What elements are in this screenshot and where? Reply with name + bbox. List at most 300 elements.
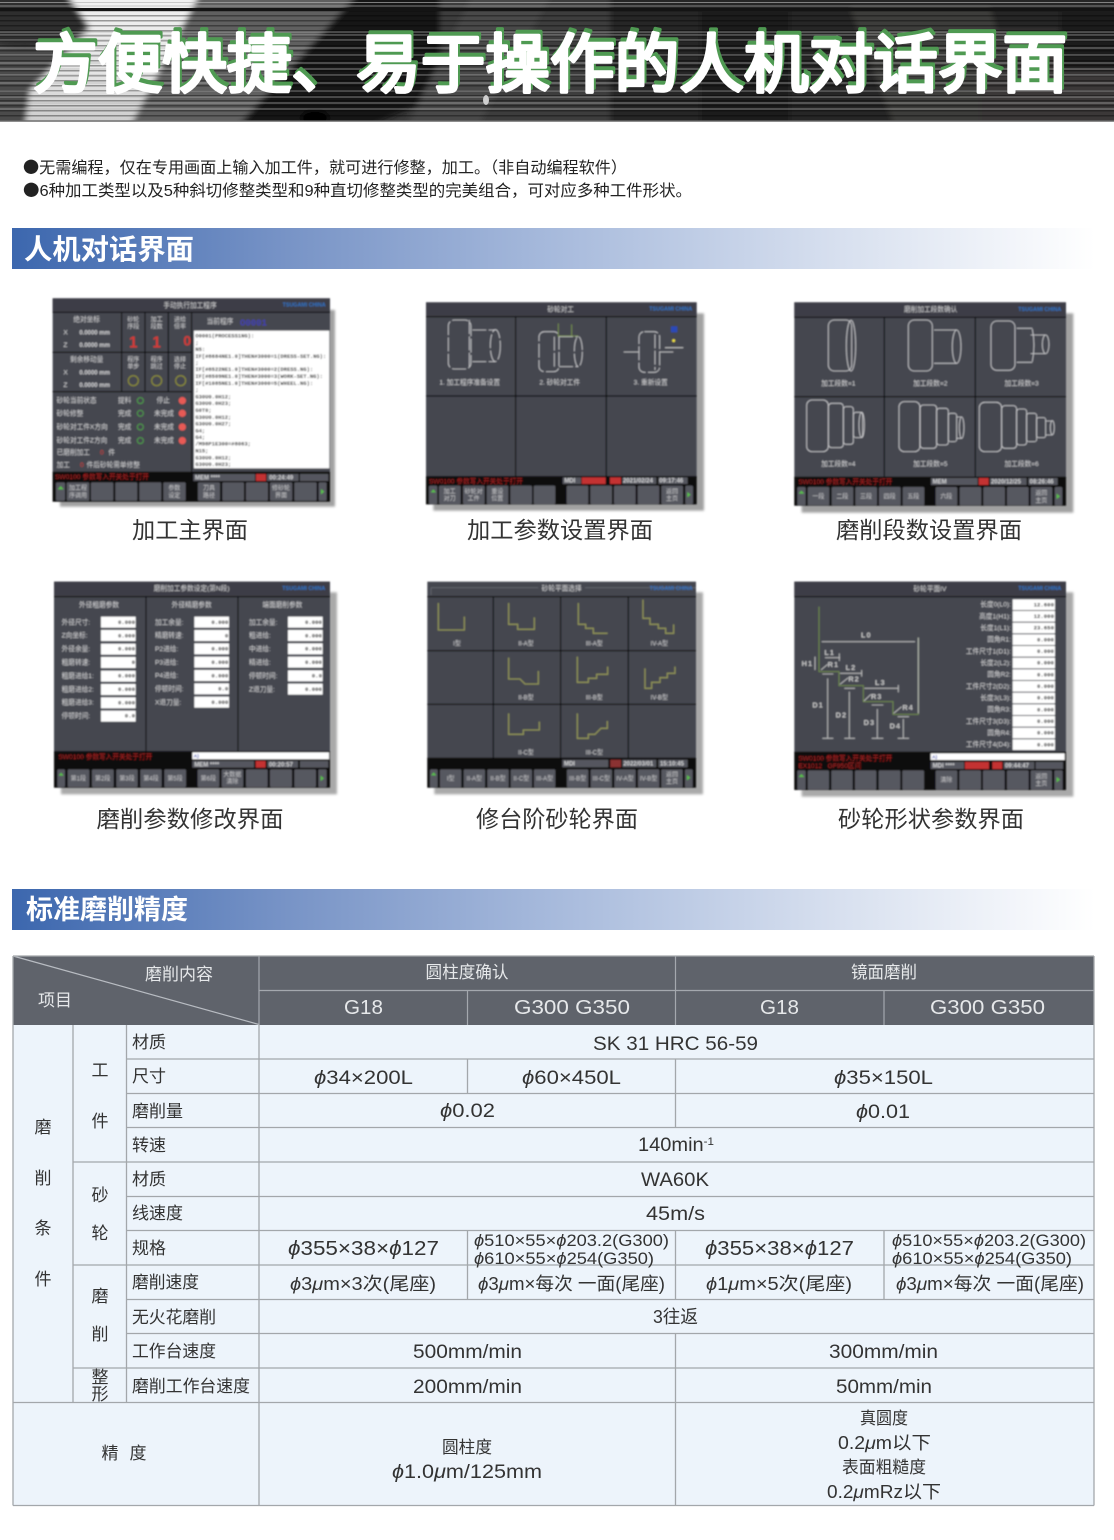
table values: 圆柱度 <box>442 1438 492 1457</box>
screen: 磨削参数修改界面: 外径粗磨参数 <box>79 600 119 609</box>
screen: 磨削参数修改界面: 0.000 <box>211 699 229 706</box>
row group labels: 件 <box>92 1112 108 1131</box>
screen: 加工主界面: 停止 <box>157 396 170 405</box>
screen: 砂轮形状参数界面: 12.600 <box>1034 601 1055 608</box>
caption: 磨削参数修改界面 <box>96 806 284 832</box>
screen: 磨削参数修改界面: 0.000 <box>305 632 323 639</box>
screen: 磨削参数修改界面: 0.000 <box>211 619 229 626</box>
screen: 砂轮形状参数界面: EX1012 GF950区间 <box>798 762 862 770</box>
screen: 磨削段数设置界面: 2020/12/25 <box>991 479 1022 485</box>
screen: 砂轮形状参数界面: 长度0(L0): <box>980 600 1011 609</box>
screen: 修台阶砂轮界面: IV-A型 <box>616 774 634 782</box>
screen: 加工主界面: 程序 <box>151 356 163 364</box>
screen: 加工主界面: 0.0000 mm <box>79 343 110 349</box>
table header: G300 G350 <box>514 997 630 1019</box>
screen: 修台阶砂轮界面: 主页 <box>666 778 678 786</box>
screen: 磨削参数修改界面: 0.000 <box>305 659 323 666</box>
screen: 加工主界面: 砂轮修整 <box>57 408 84 417</box>
screen: 磨削段数设置界面: 五段 <box>907 492 919 500</box>
screen: 修台阶砂轮界面: II-A型 <box>467 774 482 782</box>
table values: 300mm/min <box>829 1342 938 1363</box>
table header: 圆柱度确认 <box>426 963 508 982</box>
screen: 砂轮形状参数界面: 工件尺寸1(D1): <box>966 646 1011 655</box>
screen: 加工主界面: 0.0000 mm <box>79 331 110 337</box>
screen: 磨削段数设置界面: 加工段数=3 <box>1005 379 1039 388</box>
screen: 加工主界面: G30U0.0H23; <box>195 400 231 407</box>
screen: 加工主界面: 进给 <box>174 316 186 324</box>
screen: 修台阶砂轮界面: I型 <box>447 774 454 782</box>
row group labels: 轮 <box>92 1224 108 1243</box>
table values: 500mm/min <box>413 1342 522 1363</box>
section heading: 标准磨削精度: 标准磨削精度 <box>26 895 188 925</box>
table values: ϕ0.02 <box>440 1101 495 1122</box>
screen: 加工主界面: 砂轮对工件X方向 <box>57 422 108 431</box>
screen: 磨削参数修改界面: SW0100 参数写入开关处于打开 <box>58 752 153 761</box>
screen: 加工主界面: 刀具 <box>203 485 215 492</box>
screen: 加工主界面: X <box>63 369 68 376</box>
screen: 加工主界面: X <box>63 330 68 337</box>
screen: 修台阶砂轮界面: 2022/03/01 <box>623 761 654 767</box>
screen: 砂轮形状参数界面: 长度1(L1): <box>980 623 1011 632</box>
row group labels: 削 <box>92 1325 108 1344</box>
screen: 加工参数设置界面: SW0100 参数写入开关处于打开 <box>429 476 523 485</box>
screen: 砂轮形状参数界面: 0.000 <box>1037 695 1055 702</box>
screen: 加工主界面: 0.0000 mm <box>79 370 110 376</box>
screen: 加工参数设置界面: 位置 <box>491 495 503 503</box>
screen: 磨削参数修改界面: A) <box>194 754 199 760</box>
screen: 磨削参数修改界面: TSUGAMI CHINA <box>282 586 325 592</box>
intro text: ●6种加工类型以及5种斜切修整类型和9种直切修整类型的完美组合，可对应多种工件形状。 <box>23 177 692 201</box>
screen: 加工主界面: O0001(PROCESS1NG): <box>195 333 254 340</box>
table values: ϕ0.01 <box>856 1102 910 1123</box>
table header: G300 G350 <box>930 997 1045 1019</box>
table values: 真圆度 <box>860 1409 908 1428</box>
screen: 磨削段数设置界面: 返回 <box>1035 490 1047 497</box>
row names: 磨削量 <box>132 1102 183 1121</box>
screen: 磨削段数设置界面 <box>794 302 1073 513</box>
row names <box>132 1033 250 1396</box>
screen: 砂轮形状参数界面: L2 <box>846 663 856 672</box>
screen: 加工主界面: 0 <box>80 462 84 469</box>
screen: 修台阶砂轮界面: I型 <box>453 640 461 648</box>
caption: 加工参数设置界面 <box>467 517 653 543</box>
screen: 加工主界面: 序调用 <box>69 491 87 499</box>
screen: 加工参数设置界面: 2. 砂轮对工件 <box>539 377 580 386</box>
screen: 磨削参数修改界面: 加工余量: <box>155 617 184 626</box>
screen: 加工主界面: O0001 <box>240 318 268 328</box>
screen: 加工主界面: ; <box>195 339 199 346</box>
table values: 200mm/min <box>413 1377 522 1398</box>
screen: 砂轮形状参数界面: 0.000 <box>1037 706 1055 713</box>
screen: 磨削段数设置界面: 加工段数=6 <box>1005 459 1039 468</box>
screen: 磨削参数修改界面: 精磨转速: <box>155 631 184 640</box>
screen: 加工参数设置界面: 对刀 <box>444 495 456 503</box>
screen: 加工主界面: 停止 <box>174 362 186 370</box>
screen: 磨削参数修改界面: 0.000 <box>211 672 229 679</box>
screen: 磨削参数修改界面: 粗磨转速: <box>62 657 90 666</box>
screen: 砂轮形状参数界面: TSUGAMI CHINA <box>1018 586 1061 592</box>
screen: 加工参数设置界面: 1. 加工程序准备设置 <box>439 377 500 386</box>
caption: 磨削段数设置界面 <box>836 517 1022 543</box>
screen: 砂轮形状参数界面: 砂轮平面IV <box>914 584 947 593</box>
screen: 砂轮形状参数界面: 工件尺寸4(D4): <box>966 740 1011 749</box>
table values: ϕ3μm×每次 一面(尾座) <box>896 1274 1084 1294</box>
screen: 加工主界面: G0T0; <box>195 407 212 414</box>
screen: 磨削参数修改界面: 0.000 <box>305 686 323 693</box>
screen: 修台阶砂轮界面: III-A型 <box>586 640 603 648</box>
screen: 修台阶砂轮界面: IV-B型 <box>640 774 657 782</box>
screen: 加工主界面: 剩余移动量 <box>70 354 104 363</box>
screen: 加工主界面: 1 <box>152 334 161 351</box>
row names: 规格 <box>132 1239 166 1258</box>
screen: 加工主界面: G30U0.0H27; <box>195 421 231 428</box>
screen: 修台阶砂轮界面: TSUGAMI CHINA <box>650 586 693 592</box>
screen: 磨削参数修改界面: 0.000 <box>118 673 136 680</box>
table values: 0.2μmRz以下 <box>827 1482 941 1502</box>
screen: 磨削段数设置界面: 主页 <box>1035 496 1047 504</box>
caption: 修台阶砂轮界面 <box>476 806 638 832</box>
table values: ϕ355×38× ϕ127 <box>705 1238 854 1260</box>
screen: 砂轮形状参数界面: L0 <box>861 631 872 640</box>
screen: 磨削参数修改界面: 0.000 <box>118 632 136 639</box>
screen: 修台阶砂轮界面: 返回 <box>666 772 678 779</box>
screen: 磨削参数修改界面: 0.000 <box>211 659 229 666</box>
screen: 加工参数设置界面: 2021/02/24 <box>623 479 654 485</box>
screen: 砂轮形状参数界面: 工件尺寸3(D3): <box>966 716 1011 725</box>
screen: 砂轮形状参数界面: 09:44:47 <box>1005 763 1030 769</box>
screen: 加工主界面: 完成 <box>118 408 132 417</box>
screen: 磨削参数修改界面: P4进给: <box>155 671 178 680</box>
screen: 加工主界面: 0 <box>183 333 191 349</box>
table values: 50mm/min <box>836 1377 932 1398</box>
table values <box>288 1034 1086 1502</box>
screen: 砂轮形状参数界面: 返回 <box>1035 773 1047 780</box>
screen: 磨削参数修改界面: 中进给: <box>249 644 271 653</box>
screen: 加工主界面: 绝对坐标 <box>73 314 100 323</box>
screen: 修台阶砂轮界面: IV-A型 <box>651 640 668 648</box>
screen: 砂轮形状参数界面: 0.000 <box>1037 683 1055 690</box>
title: 方便快捷、易于操作的人机对话界面 <box>35 10 1069 102</box>
screen: 加工主界面: G30U0.0H23; <box>195 461 231 468</box>
screen: 加工主界面 <box>53 298 335 507</box>
screen: 砂轮形状参数界面: 主页 <box>1035 780 1047 788</box>
screen: 磨削参数修改界面: 第6段 <box>201 774 216 782</box>
table values: -1 <box>704 1136 714 1148</box>
screen: 磨削段数设置界面: 四段 <box>884 492 896 500</box>
screen: 加工主界面: 修砂轮 <box>272 484 290 492</box>
screen: 磨削参数修改界面: MEM **** <box>194 762 220 768</box>
row group labels: 条 <box>34 1219 52 1238</box>
screen: 加工主界面: IF[#8684NE1.0]THEN#3000=1(DRESS-SET.NG): <box>195 353 326 360</box>
screen: 修台阶砂轮界面: 砂轮平面选择 <box>542 584 582 593</box>
screen: 加工主界面: 1 <box>129 334 138 351</box>
screen: 砂轮形状参数界面: 工件尺寸2(D2): <box>966 681 1011 690</box>
table header: 项目 <box>38 991 72 1010</box>
screen: 砂轮形状参数界面: 圆角R3: <box>987 705 1011 714</box>
screen: 加工主界面: N15; <box>195 447 208 454</box>
row names: 转速 <box>132 1136 166 1155</box>
screen: 磨削段数设置界面: 六段 <box>940 492 952 500</box>
screen: 砂轮形状参数界面: 长度3(L3): <box>980 693 1011 702</box>
row group labels: 磨 <box>34 1118 52 1137</box>
screen: 磨削参数修改界面: 0.000 <box>305 646 323 653</box>
row group labels: 工 <box>92 1061 108 1080</box>
screen: 修台阶砂轮界面 <box>427 582 703 794</box>
screen: 加工主界面: 加工 <box>57 460 70 469</box>
screen: 加工主界面: 加工 <box>151 316 163 324</box>
screen: 加工主界面: 已磨削加工 <box>57 448 90 457</box>
screen: 砂轮形状参数界面: 长度2(L2): <box>980 658 1011 667</box>
row group labels: 形 <box>92 1385 108 1404</box>
screen: 加工主界面: G4; <box>195 427 205 434</box>
screen: 磨削参数修改界面: 0.000 <box>118 686 136 693</box>
screen: 磨削参数修改界面: 加工余量: <box>249 617 278 626</box>
screen: 砂轮形状参数界面: 圆角R4: <box>987 728 1011 737</box>
row group labels: 砂 <box>92 1186 108 1205</box>
screen: 磨削段数设置界面: 加工段数=4 <box>821 459 856 468</box>
table header: G18 <box>344 997 383 1019</box>
table values: ϕ60×450L <box>522 1068 621 1089</box>
screen: 修台阶砂轮界面: 15:10:45 <box>660 761 685 767</box>
screen: 磨削参数修改界面: Z退刀量: <box>249 684 275 693</box>
table values: ϕ510×55× ϕ203.2(G300) <box>892 1231 1086 1250</box>
screen: 磨削参数修改界面: 0.0 <box>218 686 229 693</box>
screen: 加工参数设置界面 <box>426 302 704 511</box>
screen: 砂轮形状参数界面: H1 <box>802 659 813 668</box>
screen: 磨削参数修改界面: 0.000 <box>118 699 136 706</box>
screen: 磨削参数修改界面: 0.0 <box>125 713 136 720</box>
screen: 砂轮形状参数界面 <box>794 582 1073 797</box>
screen: 加工参数设置界面: 3. 重新设置 <box>634 377 668 386</box>
screen: 修台阶砂轮界面: II-B型 <box>490 774 506 782</box>
screen: 加工主界面: 砂轮 <box>127 316 139 324</box>
screen: 加工主界面: 件后砂轮需单修整 <box>87 460 140 469</box>
row names: 磨削工作台速度 <box>132 1377 250 1396</box>
screen: 磨削参数修改界面: 第3段 <box>119 774 135 782</box>
screen: 磨削参数修改界面: 0.000 <box>305 619 323 626</box>
screen: 修台阶砂轮界面: III-B型 <box>569 774 586 782</box>
screen: 加工主界面: IF[#8522NE1.0]THEN#3000=2(DRESS.NG): <box>195 366 313 373</box>
screen: 砂轮形状参数界面: SW0100 参数写入开关处于打开 <box>798 753 893 762</box>
screen: 磨削段数设置界面: SW0100 参数写入开关处于打开 <box>798 477 893 486</box>
screen: 磨削段数设置界面: MEM <box>933 479 947 485</box>
intro text: ●无需编程，仅在专用画面上输入加工件，就可进行修整，加工。（非自动编程软件） <box>23 154 627 178</box>
intro text <box>23 154 692 201</box>
screen: 加工主界面: SW0100 参数写入开关处于打开 <box>55 472 149 481</box>
screen: 修台阶砂轮界面: III-C型 <box>593 774 610 782</box>
header banner <box>0 0 1114 122</box>
screen: 加工参数设置界面: 砂轮对 <box>465 488 483 496</box>
row names: 工作台速度 <box>132 1342 216 1361</box>
screen: 加工参数设置界面: 工件 <box>468 495 480 503</box>
table values: ϕ34×200L <box>314 1068 413 1089</box>
table values: ϕ3μm×每次 一面(尾座) <box>478 1274 665 1294</box>
screen: 磨削参数修改界面: P2进给: <box>155 644 178 653</box>
screen: 加工主界面: G4; <box>195 434 205 441</box>
caption: 砂轮形状参数界面 <box>838 806 1024 832</box>
screen: 修台阶砂轮界面: III-B型 <box>586 694 603 702</box>
screen: 磨削参数修改界面: 第5段 <box>167 774 183 782</box>
screen: 砂轮形状参数界面: 圆角R1: <box>987 635 1011 644</box>
screen: 加工参数设置界面: 09:17:46 <box>659 479 684 485</box>
table header: 磨削内容 <box>145 965 213 984</box>
screen: 砂轮形状参数界面: 0.000 <box>1037 671 1055 678</box>
screen: 磨削参数修改界面: X退刀量: <box>155 697 181 706</box>
screen: 加工主界面: 未完成 <box>154 422 174 431</box>
screen: 磨削段数设置界面: 加工段数=1 <box>821 379 856 388</box>
screen: 加工参数设置界面: 重设 <box>491 488 503 496</box>
screen: 加工主界面: ; <box>195 387 199 394</box>
screen: 磨削段数设置界面: 加工段数=2 <box>913 379 948 388</box>
table values: 表面粗糙度 <box>842 1458 926 1477</box>
table values: 45m/s <box>646 1204 705 1225</box>
screen: 砂轮形状参数界面: R1 <box>828 660 839 669</box>
screen: 砂轮形状参数界面: D2 <box>836 711 847 720</box>
screen: 磨削参数修改界面: 00:20:57 <box>269 762 294 768</box>
screen: 磨削参数修改界面: 第4段 <box>143 774 159 782</box>
screen: 磨削参数修改界面: 第1段 <box>71 774 86 782</box>
row group labels <box>34 1061 146 1463</box>
screen: 磨削段数设置界面: 加工段数=5 <box>913 459 948 468</box>
screen: 加工参数设置界面: 砂轮对工 <box>547 304 574 313</box>
screen: 砂轮形状参数界面: 圆角R2: <box>987 670 1011 679</box>
screen: 砂轮形状参数界面: A) <box>932 755 938 761</box>
screen: 磨削参数修改界面: 停顿时间: <box>155 684 184 693</box>
screen: 加工参数设置界面: TSUGAMI CHINA <box>649 306 692 312</box>
screen: 加工主界面: /M98P1E300=#8063; <box>195 441 251 448</box>
section heading: 人机对话界面 <box>12 228 1095 269</box>
screen: 修台阶砂轮界面: II-C型 <box>514 774 529 782</box>
screen: 加工主界面: 路径 <box>203 491 215 499</box>
screen: 砂轮形状参数界面: 23.650 <box>1034 625 1055 632</box>
table header: 镜面磨削 <box>851 963 917 982</box>
table values: SK 31 HRC 56-59 <box>593 1034 758 1055</box>
table values: 0.2μm以下 <box>838 1433 931 1453</box>
row names: 线速度 <box>132 1204 183 1223</box>
screen: 修台阶砂轮界面: IV-B型 <box>651 694 668 702</box>
table values: ϕ1μm×5次(尾座) <box>706 1274 852 1294</box>
screen: 加工主界面: 段数 <box>151 322 163 330</box>
screen: 砂轮形状参数界面: 高度1(H1): <box>979 611 1011 620</box>
screen: 加工主界面: 00:24:49 <box>269 476 294 482</box>
screen: 磨削段数设置界面: 一段 <box>812 492 824 500</box>
row group labels: 件 <box>34 1270 52 1289</box>
screen: 加工主界面: ; <box>195 359 199 366</box>
screen: 加工主界面: 设定 <box>168 491 180 499</box>
screen: 砂轮形状参数界面: D4 <box>890 721 901 730</box>
screen: 磨削参数修改界面: 磨削加工参数设定(第N段) <box>154 584 230 593</box>
screen: 加工主界面: 跳过 <box>151 362 163 370</box>
screen: 砂轮形状参数界面: D1 <box>812 701 824 710</box>
table values: ϕ35×150L <box>834 1068 933 1089</box>
screen: 磨削参数修改界面: 大数据 <box>223 771 241 779</box>
screen: 磨削参数修改界面: 清除 <box>226 778 238 786</box>
screen: 加工主界面: 未完成 <box>154 436 174 445</box>
screen: 修台阶砂轮界面: II-A型 <box>518 640 534 648</box>
screen: 砂轮形状参数界面: 0.000 <box>1037 648 1055 655</box>
screen: 磨削参数修改界面: 外径尺寸: <box>62 617 90 626</box>
screen: 修台阶砂轮界面: II-B型 <box>518 694 534 702</box>
row names: 材质 <box>132 1170 166 1189</box>
screen: 砂轮形状参数界面: 清除 <box>940 776 952 784</box>
section heading: 人机对话界面: 人机对话界面 <box>24 234 194 265</box>
screen: 修台阶砂轮界面: III-C型 <box>586 749 603 757</box>
screen: 加工主界面: IF[#1085NE1.0]THEN#3000=5(WHEEL.NG): <box>195 380 313 387</box>
row names: 磨削速度 <box>132 1273 199 1292</box>
table values: 140min <box>638 1135 700 1156</box>
screen: 加工主界面: 砂轮对工件Z方向 <box>57 436 108 445</box>
screen: 磨削参数修改界面: 0 <box>132 659 136 666</box>
screen: 磨削参数修改界面: 第2段 <box>95 774 110 782</box>
screen: 砂轮形状参数界面: L1 <box>824 648 835 657</box>
screen: 磨削参数修改界面: 端面磨削参数 <box>262 600 303 609</box>
screen: 修台阶砂轮界面: III-A型 <box>536 774 553 782</box>
screen: 磨削参数修改界面: 精进给: <box>249 657 271 666</box>
screen: 加工主界面: 加工程 <box>69 484 87 492</box>
screen: 磨削参数修改界面: 停顿时间: <box>249 671 278 680</box>
screen: 砂轮形状参数界面: R2 <box>848 675 860 684</box>
screen: 加工参数设置界面: 返回 <box>666 489 678 496</box>
table values: ϕ1.0μm/125mm <box>392 1462 542 1483</box>
table values: ϕ610×55× ϕ254(G350) <box>892 1249 1072 1268</box>
screen: 磨削参数修改界面: 0.000 <box>211 646 229 653</box>
screen: 砂轮形状参数界面: 0.000 <box>1037 741 1055 748</box>
screen: 磨削段数设置界面: TSUGAMI CHINA <box>1018 307 1061 313</box>
screen: 加工主界面: 选择 <box>174 356 186 364</box>
screen: 砂轮形状参数界面: L3 <box>875 678 886 687</box>
table values: ϕ355×38× ϕ127 <box>288 1238 439 1260</box>
screen: 磨削参数修改界面: 粗进给: <box>249 631 271 640</box>
screen: 磨削段数设置界面: 二段 <box>836 492 848 500</box>
caption: 加工主界面 <box>132 517 248 543</box>
table: 标准磨削精度 <box>13 956 1094 1506</box>
screen: 砂轮形状参数界面: MDI **** <box>933 763 955 769</box>
screen: 砂轮形状参数界面: 0.000 <box>1037 718 1055 725</box>
screen: 加工主界面: 单步 <box>127 362 139 370</box>
screen: 加工主界面: G30U0.0H12; <box>195 454 231 461</box>
screen: 加工主界面: TSUGAMI CHINA <box>283 303 326 309</box>
screen: 磨削段数设置界面: 08:26:46 <box>1030 479 1054 485</box>
screen: 加工主界面: 未完成 <box>154 408 174 417</box>
screen: 磨削参数修改界面: 0.000 <box>118 646 136 653</box>
screen: 磨削段数设置界面: 三段 <box>860 492 872 500</box>
screen: 磨削段数设置界面: 磨削加工段数确认 <box>904 305 958 314</box>
screen: 加工主界面: 程序 <box>127 356 139 364</box>
screen: 加工参数设置界面: 加工 <box>444 488 456 496</box>
screen: 砂轮形状参数界面: R4 <box>902 703 914 712</box>
screen: 加工主界面: Z <box>63 342 67 349</box>
table header <box>13 956 1094 1025</box>
screen: 加工主界面: 件 <box>108 448 115 457</box>
screen: 磨削参数修改界面: P3进给: <box>155 657 178 666</box>
screen: 加工主界面: G30U0.0H12; <box>195 393 231 400</box>
screen: 磨削参数修改界面: 0.0 <box>312 673 323 680</box>
screen: 磨削参数修改界面: 停顿时间: <box>62 711 90 720</box>
screen: 磨削参数修改界面: 粗磨进给1: <box>62 671 94 680</box>
table values: ϕ610×55× ϕ254(G350) <box>474 1249 654 1268</box>
screen: 加工主界面: 倍率 <box>174 322 186 330</box>
screen: 加工主界面: Z <box>63 382 67 389</box>
screen: 加工主界面: 手动执行加工程序 <box>163 300 217 309</box>
table values: WA60K <box>641 1170 709 1191</box>
screen: 加工主界面: 提料 <box>118 396 132 405</box>
screen: 加工参数设置界面: 主页 <box>666 495 678 503</box>
screen: 加工主界面: 0.0000 mm <box>79 383 110 389</box>
screen: 砂轮形状参数界面: D3 <box>864 718 875 727</box>
screen: 砂轮形状参数界面: 0.000 <box>1037 660 1055 667</box>
row group labels: 削 <box>34 1169 52 1188</box>
row group labels: 精 度 <box>102 1444 146 1463</box>
